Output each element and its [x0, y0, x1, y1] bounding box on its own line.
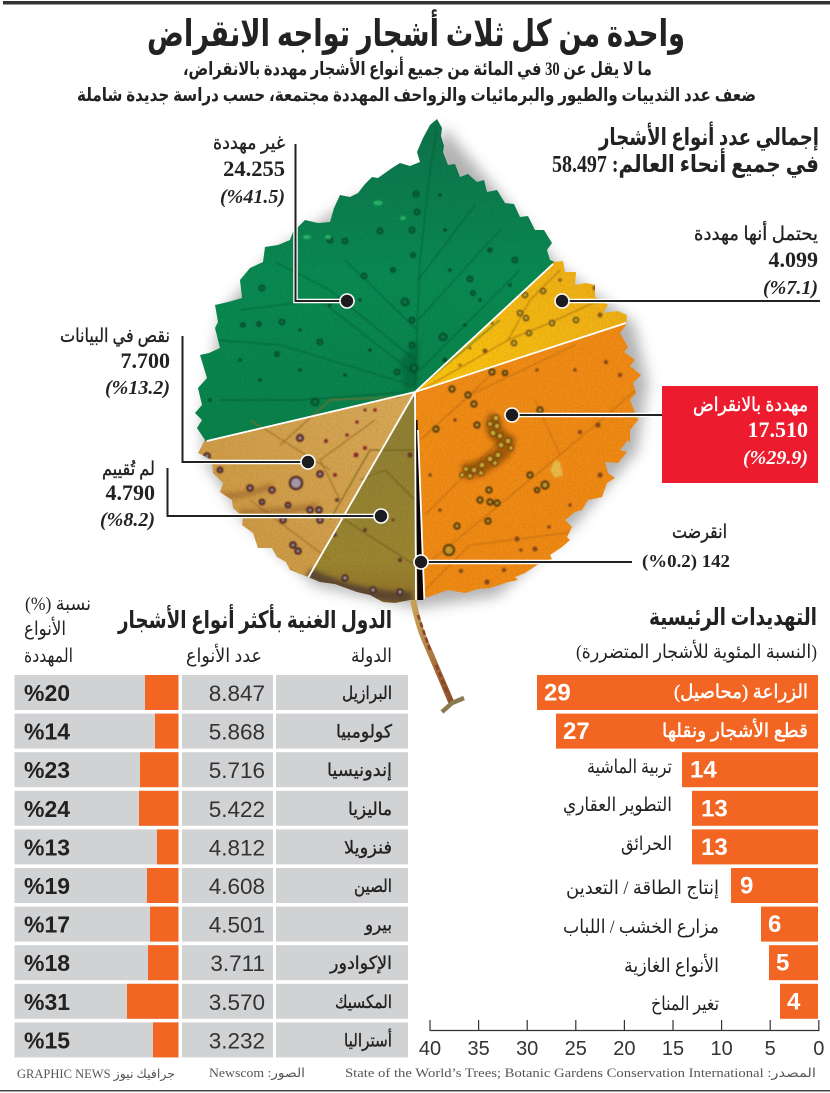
- row: Malaysia: %24: [24, 796, 70, 822]
- column headers: الأنواع: [24, 617, 66, 640]
- leaf photo pie: [194, 119, 655, 714]
- heading: total tree species: [552, 121, 819, 178]
- row: Indonesia: إندونيسيا: [327, 760, 392, 781]
- row: Australia: %15: [24, 1027, 70, 1053]
- callout: threatened with extinction: 17.510: [748, 417, 808, 442]
- bar: invasive species: [624, 945, 818, 980]
- row: China: %19: [24, 873, 70, 899]
- callout: possibly threatened: 4.099: [768, 247, 818, 272]
- column headers: الدولة: [351, 646, 392, 667]
- row: Colombia: %14: [24, 719, 70, 745]
- row: Venezuela: [14, 829, 408, 864]
- row: Mexico: %31: [24, 989, 70, 1015]
- footer credits: [17, 1066, 816, 1082]
- segment: data deficient: [198, 394, 413, 577]
- bar: agriculture: الزراعة (محاصيل): [674, 682, 808, 703]
- x axis: 5: [765, 1038, 776, 1060]
- callout: not threatened: (%41.5): [220, 186, 285, 208]
- yellow veins and spots: [418, 270, 602, 392]
- olive veins and spots: [308, 408, 415, 597]
- row: Mexico: المكسيك: [335, 992, 392, 1012]
- callout: threatened with extinction: مهددة بالانقراض: [693, 395, 808, 416]
- bar: invasive species: الأنواع الغازية: [624, 954, 719, 977]
- callout: data deficient: 7.700: [120, 348, 170, 373]
- x axis: 35: [467, 1038, 490, 1060]
- x axis: 15: [662, 1038, 684, 1060]
- bar: logging: 27: [563, 718, 590, 745]
- row: Malaysia: ماليزيا: [348, 799, 392, 820]
- leaf shadow: [202, 127, 648, 608]
- callout: not evaluated: (%8.2): [100, 509, 155, 531]
- bar: real estate development: [563, 791, 818, 826]
- subtitle: [77, 57, 756, 106]
- row: Peru: %17: [24, 912, 70, 938]
- callout: not evaluated: [100, 459, 388, 531]
- row: Malaysia: [14, 791, 408, 826]
- bar: fires: [621, 829, 818, 864]
- bar: energy and mining: [566, 868, 818, 903]
- bar: energy and mining: إنتاج الطاقة / التعدين: [566, 878, 719, 900]
- row: Brazil: [14, 675, 408, 710]
- callout: possibly threatened: (%7.1): [763, 277, 818, 299]
- row: Ecuador: [14, 945, 408, 980]
- callout: data deficient: نقص في البيانات: [60, 326, 170, 347]
- row: Mexico: 3.570: [209, 990, 265, 1015]
- bar: agriculture: [537, 675, 818, 710]
- callout: possibly threatened: [555, 221, 820, 308]
- segment: not evaluated: [308, 396, 418, 603]
- column headers: نسبة (%): [25, 594, 91, 615]
- callout: possibly threatened: يحتمل أنها مهددة: [694, 221, 818, 245]
- footer credits: المصدر: State of the World’s Trees; Botanic Gardens Conservation International: [345, 1066, 816, 1081]
- callout: not evaluated: 4.790: [106, 480, 155, 505]
- x axis: 0: [813, 1038, 824, 1060]
- footer credits: الصور: Newscom: [209, 1066, 305, 1081]
- leaf blade: [195, 119, 641, 603]
- row: China: الصين: [354, 876, 392, 897]
- bar: climate change: [651, 984, 818, 1019]
- x axis: 40: [419, 1038, 441, 1060]
- row: Ecuador: 3.711: [210, 951, 265, 976]
- table heading: الدول الغنية بأكثر أنواع الأشجار: [117, 604, 392, 634]
- row: Australia: 3.232: [209, 1028, 265, 1053]
- x axis: 25: [565, 1038, 587, 1060]
- orange veins and spots: [420, 345, 636, 590]
- bottom rule: [0, 1090, 830, 1092]
- callout: data deficient: [60, 326, 315, 469]
- row: Malaysia: 5.422: [209, 797, 265, 822]
- row: Australia: أستراليا: [344, 1028, 392, 1051]
- bar: timber and pulp plantations: مزارع الخشب / اللباب: [563, 917, 719, 938]
- row: Indonesia: %23: [24, 757, 70, 783]
- row: China: 4.608: [209, 874, 265, 899]
- bar: timber and pulp plantations: [563, 907, 818, 942]
- row: Venezuela: 4.812: [209, 835, 265, 860]
- bar: climate change: تغير المناخ: [651, 994, 719, 1015]
- segment: possibly threatened: [418, 261, 627, 390]
- row: Venezuela: فنزويلا: [344, 837, 392, 858]
- footer credits: GRAPHIC NEWS جرافيك نيوز: [17, 1067, 175, 1082]
- column headers: [24, 594, 392, 667]
- row: Colombia: كولومبيا: [336, 722, 392, 743]
- callout: not evaluated: لم تُقييم: [102, 459, 155, 480]
- row: Peru: 4.501: [209, 913, 265, 938]
- bar: logging: [556, 714, 818, 749]
- row: Colombia: [14, 714, 408, 749]
- bar: timber and pulp plantations: 6: [768, 911, 781, 938]
- callout: extinct: [414, 522, 730, 572]
- callout: not threatened: غير مهددة: [213, 133, 285, 154]
- panel: richest countries table: [14, 594, 408, 1057]
- leaf grain texture: [198, 149, 640, 598]
- leaf stem: [413, 600, 464, 712]
- bar: livestock: [587, 752, 818, 787]
- callout: threatened with extinction: [505, 386, 818, 483]
- x axis: 10: [710, 1038, 733, 1060]
- bar: real estate development: 13: [701, 795, 728, 822]
- top rule: [3, 1, 830, 4]
- row: Venezuela: %13: [24, 834, 70, 860]
- callout: not threatened: [213, 133, 354, 308]
- row: Peru: بيرو: [364, 915, 392, 936]
- segment: not threatened: [195, 119, 554, 442]
- column headers: المهددة: [24, 646, 73, 667]
- callout: not threatened: 24.255: [223, 156, 285, 181]
- tan veins and spots: [204, 397, 400, 560]
- x axis: 30: [516, 1038, 538, 1060]
- bar: fires: 13: [701, 834, 728, 861]
- x axis: 20: [613, 1038, 636, 1060]
- segment: threatened: [416, 323, 641, 600]
- subtitle: ما لا يقل عن 30 في المائة من جميع أنواع الأشجار مهددة بالانقراض،: [183, 57, 652, 80]
- row: Brazil: %20: [24, 680, 70, 706]
- bar: logging: قطع الأشجار ونقلها: [662, 719, 808, 742]
- row: Brazil: 8.847: [209, 681, 265, 706]
- row: Colombia: 5.868: [209, 720, 265, 745]
- column headers: عدد الأنواع: [186, 644, 262, 667]
- bar: agriculture: 29: [544, 680, 571, 706]
- bar: fires: الحرائق: [621, 834, 672, 855]
- bar: energy and mining: 9: [740, 872, 753, 900]
- row: Indonesia: [14, 752, 408, 787]
- x axis: [419, 1020, 824, 1060]
- row: Mexico: [14, 984, 408, 1019]
- row: Indonesia: 5.716: [209, 758, 265, 783]
- callout: extinct: (%0.2) 142: [642, 551, 730, 572]
- bar: climate change: 4: [787, 988, 801, 1015]
- row: Brazil: البرازيل: [342, 683, 392, 704]
- segment: extinct: [416, 420, 424, 600]
- row: Peru: [14, 907, 408, 942]
- bar: real estate development: التطوير العقاري: [563, 795, 672, 816]
- callout: extinct: انقرضت: [672, 522, 727, 543]
- bar: invasive species: 5: [776, 950, 789, 977]
- segment dividers: [207, 264, 626, 604]
- row: China: [14, 868, 408, 903]
- panel: main threats chart: [419, 605, 824, 1060]
- callout: data deficient: (%13.2): [105, 377, 170, 399]
- callout: threatened with extinction: (%29.9): [743, 447, 808, 469]
- row: Australia: [14, 1022, 408, 1057]
- bar: livestock: 14: [690, 757, 717, 784]
- row: Ecuador: %18: [24, 950, 70, 976]
- row: Ecuador: الإكوادور: [329, 953, 392, 974]
- green veins and spots: [208, 130, 520, 406]
- bar: livestock: تربية الماشية: [587, 757, 672, 778]
